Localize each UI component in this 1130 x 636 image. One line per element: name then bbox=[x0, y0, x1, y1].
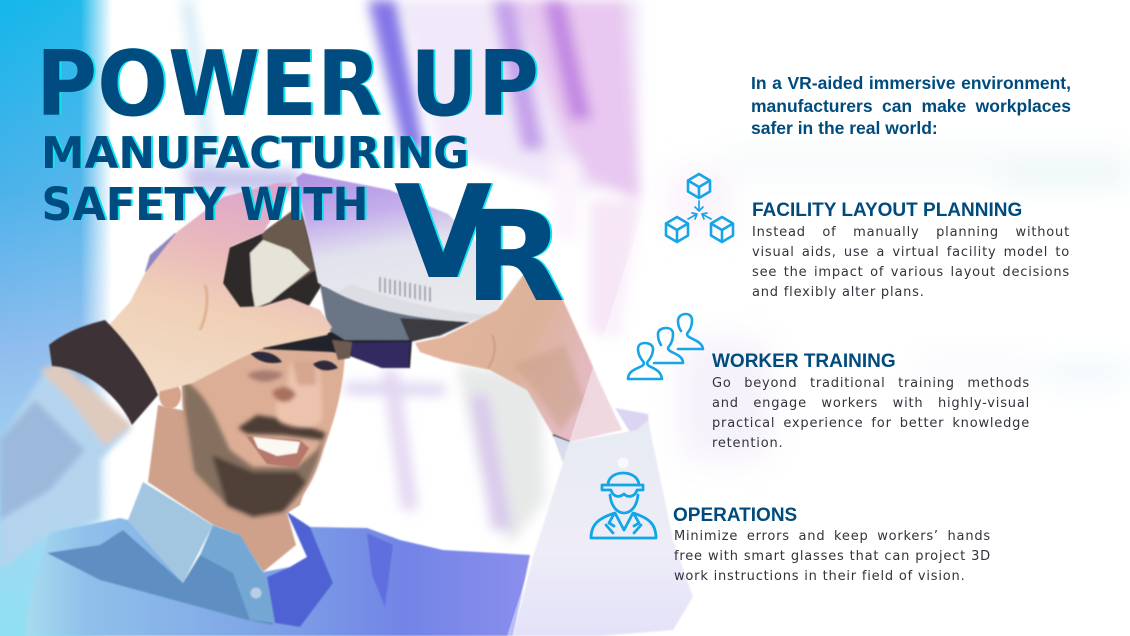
text: facility layout planning: visual aids, use a virtual facility model to bbox=[752, 245, 1070, 260]
headset underside bbox=[263, 285, 470, 368]
intro text: safer in the real world: bbox=[751, 118, 938, 138]
heading: operations: OPERATIONS bbox=[673, 505, 797, 526]
text: worker training: Go beyond traditional training methods bbox=[712, 376, 1030, 391]
title: VR: V bbox=[394, 159, 492, 308]
text: operations: free with smart glasses that can project 3D bbox=[674, 549, 991, 564]
title bbox=[36, 32, 565, 330]
hair behind hand bbox=[145, 233, 186, 275]
title: power up: POWER UP bbox=[36, 32, 539, 137]
left arm bbox=[0, 362, 132, 570]
right sleeve bbox=[513, 408, 693, 636]
text: facility layout planning: and flexibly alter plans. bbox=[752, 285, 925, 300]
text: worker training: retention. bbox=[712, 436, 783, 451]
text: operations bbox=[674, 529, 991, 584]
neck bbox=[148, 405, 320, 572]
text: facility layout planning: see the impact of various layout decisions bbox=[752, 265, 1070, 280]
title: VR: R bbox=[464, 185, 565, 330]
heading: worker training: WORKER TRAINING bbox=[712, 351, 896, 372]
title: safety with: SAFETY WITH bbox=[42, 178, 368, 231]
diagonal translucent panel bbox=[507, 0, 1130, 636]
beard bbox=[183, 380, 326, 517]
wristband bbox=[49, 320, 158, 425]
panel: worker training bbox=[712, 351, 1030, 451]
intro text: In a VR-aided immersive environment, bbox=[751, 73, 1071, 93]
intro text bbox=[751, 73, 1071, 138]
title: manufacturing: MANUFACTURING bbox=[41, 128, 469, 179]
text: facility layout planning bbox=[752, 225, 1070, 300]
VR headset bbox=[296, 173, 504, 322]
shirt bbox=[25, 482, 530, 636]
left hand bbox=[100, 183, 332, 392]
title: VR bbox=[394, 159, 565, 330]
text: worker training bbox=[712, 376, 1030, 451]
right hand bbox=[415, 275, 622, 442]
heading: facility layout planning: FACILITY LAYOUT PLANNING bbox=[752, 200, 1022, 221]
panel: facility layout planning bbox=[752, 200, 1070, 300]
text: worker training: practical experience for better knowledge bbox=[712, 416, 1030, 431]
text: facility layout planning: Instead of manually planning without bbox=[752, 225, 1070, 240]
face bbox=[159, 345, 345, 517]
panel: operations bbox=[673, 505, 991, 584]
intro text: manufacturers can make workplaces bbox=[751, 96, 1071, 116]
icon: group of workers bbox=[628, 314, 703, 379]
headset rear and pad bbox=[222, 205, 322, 320]
left colour band bbox=[0, 0, 112, 636]
blurred background stripes bbox=[182, 0, 640, 545]
icon: cubes converging bbox=[666, 174, 733, 242]
text: operations: Minimize errors and keep workers’ hands bbox=[674, 529, 991, 544]
faint colour bands on the right bbox=[670, 150, 1130, 460]
text: operations: work instructions in their field of vision. bbox=[674, 569, 966, 584]
text: worker training: and engage workers with highly-visual bbox=[712, 396, 1030, 411]
icon: worker with smart glasses bbox=[591, 473, 656, 538]
